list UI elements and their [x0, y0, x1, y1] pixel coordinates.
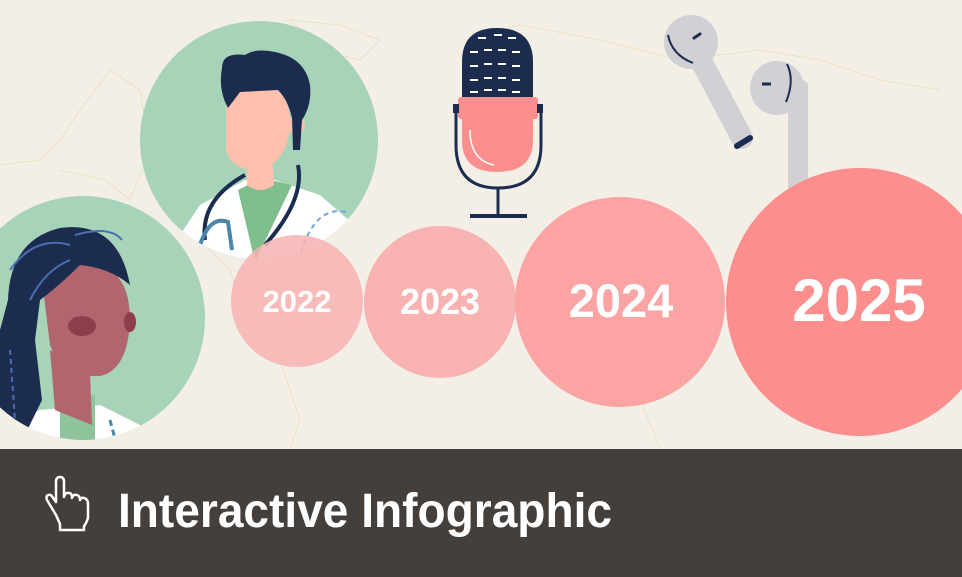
microphone icon: [453, 28, 543, 218]
banner title: Interactive Infographic: [118, 485, 612, 538]
year circle 2023: 2023: [400, 281, 480, 322]
year circle 2022: [231, 235, 363, 367]
year circle 2025: [726, 168, 962, 436]
doctor man circle: [140, 21, 378, 270]
doctor woman circle: [0, 196, 205, 460]
year circle 2024: [515, 197, 725, 407]
year circle 2024: 2024: [569, 274, 673, 327]
year circle 2022: 2022: [263, 284, 331, 319]
bottom banner: [0, 449, 962, 577]
year circle 2023: [364, 226, 516, 378]
earbuds icon: [664, 15, 808, 201]
map outlines: [0, 20, 940, 448]
year circle 2025: 2025: [792, 267, 926, 334]
icon: pointing hand: [46, 477, 88, 530]
